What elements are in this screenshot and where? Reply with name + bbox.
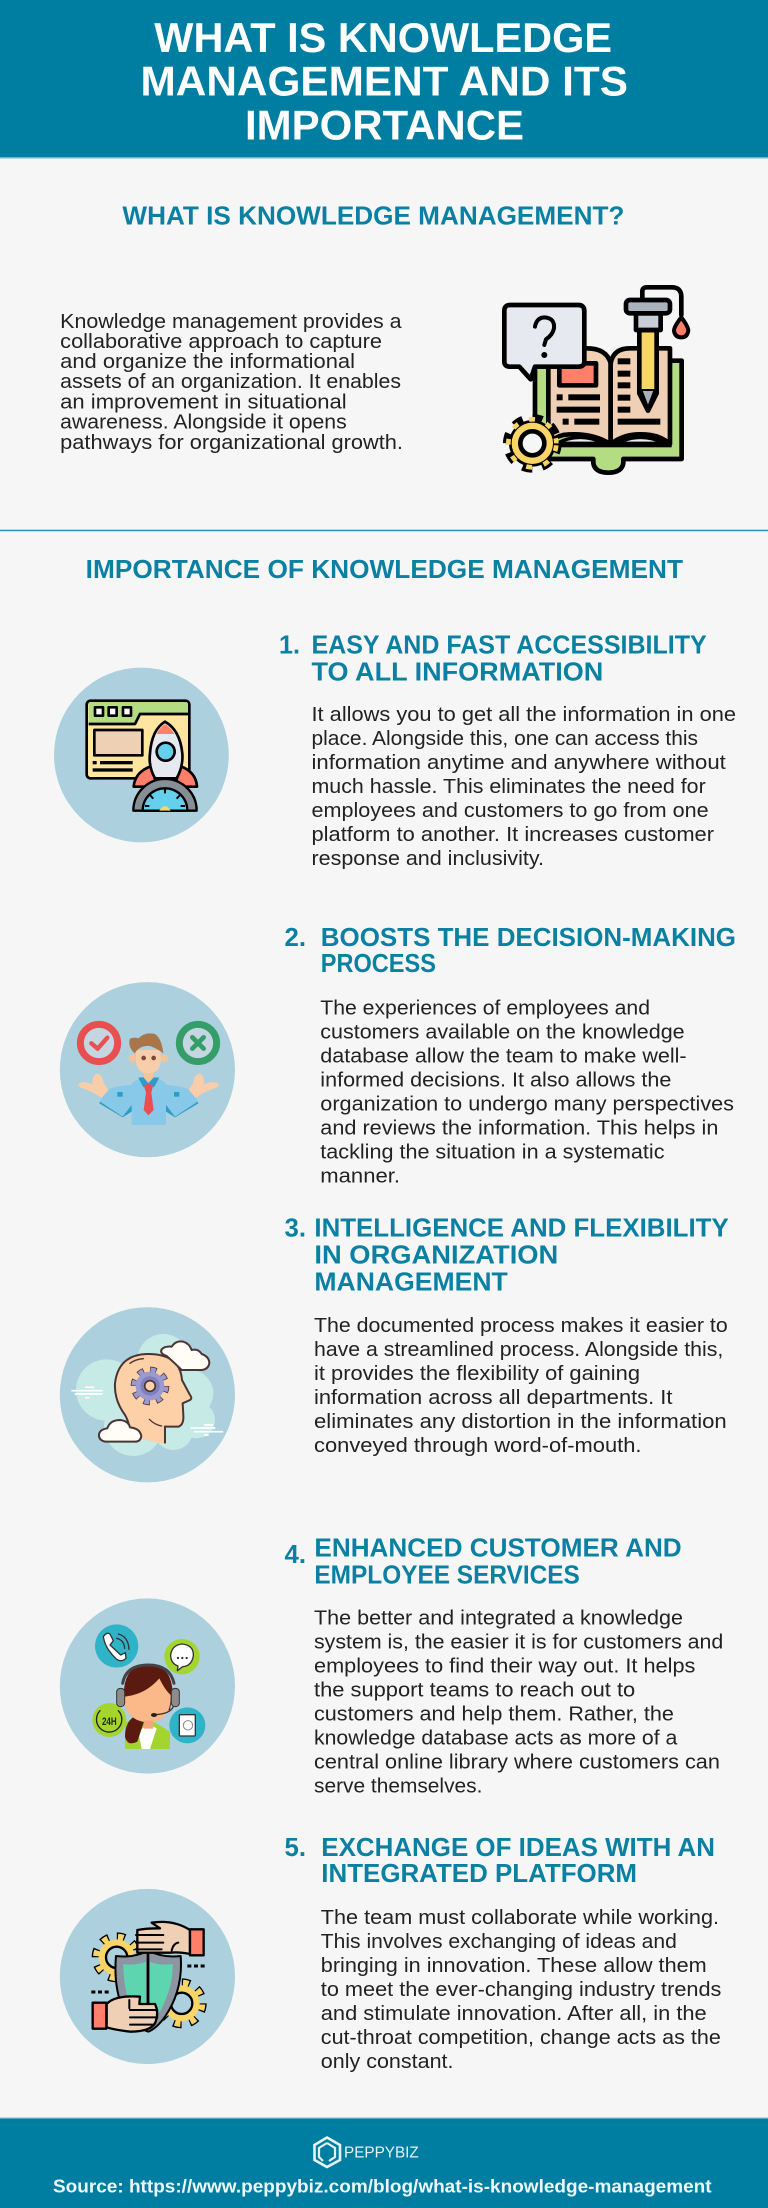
panel: item 5 exchange of ideas xyxy=(60,1832,721,2073)
top cloud xyxy=(161,1341,209,1370)
text block: item 5: to meet the ever-changing industry trends xyxy=(321,1978,721,2001)
text block: item 5: only constant. xyxy=(321,2050,454,2073)
heading: item 3: INTELLIGENCE AND FLEXIBILITY xyxy=(314,1213,729,1243)
heading: item 1: TO ALL INFORMATION xyxy=(312,657,603,687)
heading: item 3: MANAGEMENT xyxy=(314,1267,508,1297)
heading: item 5: INTEGRATED PLATFORM xyxy=(321,1858,637,1888)
text block: item 3 xyxy=(314,1314,728,1457)
title banner: IMPORTANCE xyxy=(245,101,524,148)
text block: item 1: much hassle. This eliminates the need for xyxy=(312,775,706,798)
title banner: MANAGEMENT AND ITS xyxy=(140,58,628,105)
heading: what is knowledge management: WHAT IS KNOWLEDGE MANAGEMENT? xyxy=(122,200,624,230)
speech bubble xyxy=(504,305,584,379)
icon: head with gear and clouds xyxy=(60,1307,235,1482)
text block: item 4: knowledge database acts as more of a xyxy=(314,1726,678,1750)
text block: definition: awareness. Alongside it opens xyxy=(60,411,347,434)
icon: hands holding shield with gears xyxy=(60,1889,235,2064)
text block: item 4: employees to find their way out. It helps xyxy=(314,1655,695,1678)
heading: item 5: EXCHANGE OF IDEAS WITH AN xyxy=(321,1832,715,1862)
gear xyxy=(507,418,558,469)
text block: item 4: The better and integrated a knowledge xyxy=(314,1606,683,1629)
text block: item 3: it provides the flexibility of gaining xyxy=(314,1362,640,1385)
text block: item 5: The team must collaborate while working. xyxy=(321,1906,719,1929)
text block: definition: an improvement in situational xyxy=(60,391,347,414)
divider line xyxy=(0,530,768,531)
text block: item 4: customers and help them. Rather, the xyxy=(314,1702,674,1725)
heading: item 4: 4. xyxy=(284,1539,306,1569)
panel: item 3 intelligence and flexibility xyxy=(60,1213,729,1482)
title banner xyxy=(0,0,768,158)
panel: item 4 customer services xyxy=(60,1533,723,1798)
text block: item 2: database allow the team to make well- xyxy=(320,1044,687,1067)
logo: peppybiz xyxy=(314,2138,419,2167)
bottom cloud xyxy=(99,1420,141,1442)
pen xyxy=(626,287,688,411)
text block: item 2 xyxy=(320,996,734,1187)
text block: item 2: tackling the situation in a systematic xyxy=(320,1140,664,1163)
heading: item 2: BOOSTS THE DECISION-MAKING xyxy=(321,922,736,952)
heading: item 4: EMPLOYEE SERVICES xyxy=(314,1559,580,1589)
text block: definition xyxy=(60,310,403,454)
text block: item 1: platform to another. It increases customer xyxy=(312,823,714,846)
text block: item 5: bringing in innovation. These allow them xyxy=(321,1954,707,1977)
source line: Source: https://www.peppybiz.com/blog/what-is-knowledge-management xyxy=(53,2177,712,2197)
footer band xyxy=(0,2117,768,2208)
text block: item 1: place. Alongside this, one can access this xyxy=(312,727,698,750)
text block: item 3: The documented process makes it easier to xyxy=(314,1314,728,1337)
panel: item 1 accessibility xyxy=(54,630,736,870)
heading: item 3: 3. xyxy=(284,1213,306,1243)
text block: item 4: central online library where customers can xyxy=(314,1751,720,1774)
text block: definition: assets of an organization. It enables xyxy=(60,370,401,393)
text block: item 4 xyxy=(314,1606,723,1798)
heading: item 2: PROCESS xyxy=(321,948,436,978)
text block: item 5: This involves exchanging of ideas and xyxy=(321,1930,677,1953)
icon: person choosing between check and cross xyxy=(60,982,235,1157)
text block: item 3: have a streamlined process. Alongside this, xyxy=(314,1338,723,1361)
heading: item 2: 2. xyxy=(284,922,306,952)
text block: item 2: informed decisions. It also allows the xyxy=(320,1068,671,1091)
heading: item 4: ENHANCED CUSTOMER AND xyxy=(314,1533,682,1563)
text block: definition: pathways for organizational growth. xyxy=(60,431,403,454)
heading: item 1: 1. xyxy=(279,630,300,660)
icon: book with question bubble, pen and gear xyxy=(504,287,688,473)
panel: item 2 decision making xyxy=(60,922,736,1187)
text block: item 3: conveyed through word-of-mouth. xyxy=(314,1434,642,1457)
text block: item 2: customers available on the knowledge xyxy=(320,1020,685,1043)
text block: item 5: and stimulate innovation. After all, in the xyxy=(321,2002,707,2025)
text block: item 1: It allows you to get all the information in one xyxy=(312,703,736,726)
text block: item 2: The experiences of employees and xyxy=(320,996,650,1019)
heading: item 2 xyxy=(284,922,736,978)
text block: item 3: eliminates any distortion in the information xyxy=(314,1410,727,1433)
heading: item 4 xyxy=(284,1533,682,1589)
heading: importance of knowledge management: IMPORTANCE OF KNOWLEDGE MANAGEMENT xyxy=(86,554,683,584)
icon: support agent with headset xyxy=(60,1598,235,1774)
logo: peppybiz: PEPPYBIZ xyxy=(344,2145,419,2162)
text block: item 5: cut-throat competition, change acts as the xyxy=(321,2026,721,2049)
text block: item 1: employees and customers to go from one xyxy=(312,799,709,822)
icon: support agent with headset: 24H xyxy=(102,1716,117,1728)
text block: item 1: information anytime and anywhere without xyxy=(312,751,726,774)
heading: item 3 xyxy=(284,1213,729,1297)
icon: rocket and browser window xyxy=(54,668,229,842)
text block: item 2: organization to undergo many perspectives xyxy=(320,1092,734,1115)
text block: item 2: manner. xyxy=(320,1164,400,1187)
title banner: WHAT IS KNOWLEDGE xyxy=(154,14,612,61)
text block: item 1: response and inclusivity. xyxy=(312,847,544,870)
text block: item 5 xyxy=(321,1906,721,2073)
text block: item 4: the support teams to reach out to xyxy=(314,1678,635,1701)
text block: item 3: information across all departments. It xyxy=(314,1386,673,1409)
text block: item 4: system is, the easier it is for customers and xyxy=(314,1630,723,1654)
heading: item 3: IN ORGANIZATION xyxy=(314,1240,558,1270)
text block: definition: and organize the informational xyxy=(60,350,355,373)
heading: item 5: 5. xyxy=(284,1832,306,1862)
heading: item 1 xyxy=(279,630,707,687)
heading: item 1: EASY AND FAST ACCESSIBILITY xyxy=(312,630,707,660)
heading: item 5 xyxy=(284,1832,715,1888)
text block: item 1 xyxy=(312,703,736,870)
text block: definition: Knowledge management provides a xyxy=(60,310,402,333)
text block: item 4: serve themselves. xyxy=(314,1775,482,1798)
text block: definition: collaborative approach to capture xyxy=(60,330,382,353)
text block: item 2: and reviews the information. This helps in xyxy=(320,1116,718,1139)
